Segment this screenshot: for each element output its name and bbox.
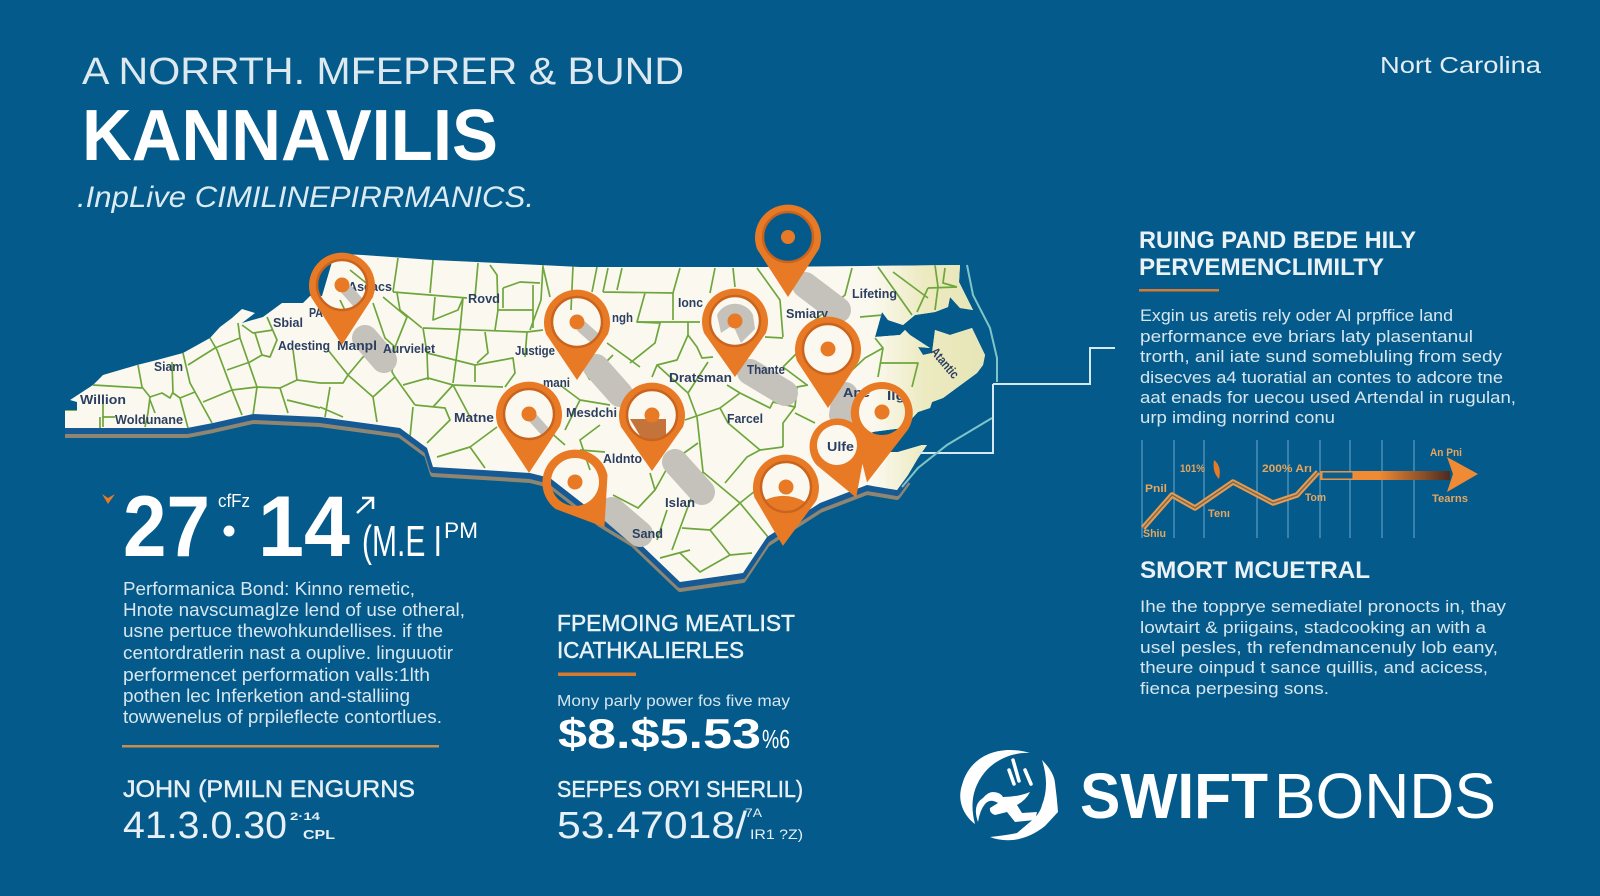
stat: john: JOHN (PMILN ENGURNS [123,776,415,803]
pin: southeast [750,453,821,548]
map place labels: PA [309,305,323,320]
map place labels: Thante [747,362,785,377]
heading [557,610,795,663]
panel: right lower text [1140,557,1507,698]
county boundaries [65,258,957,572]
pin: north, above map [755,205,821,297]
pin: central north [544,290,610,380]
map place labels: Adesting [278,338,330,353]
heading: ICATHKALIERLES [557,637,744,663]
heading: FPEMOING MEATLIST [557,610,795,636]
pin: east coast front: Ulfe [827,439,854,454]
map place labels: Sbial [273,315,303,330]
map place labels: Ionc [678,295,703,310]
map place labels: Aldnto [603,451,642,466]
stat: sefpes: SEFPES ORYI SHERLIL) [557,776,803,802]
pin shadows [365,285,845,534]
divider rule [122,745,439,748]
subtitle: .InpLive CIMILINEPIRRMANICS. [77,181,534,214]
chart labels: Pnil [1145,483,1167,495]
map place labels: Aseacs [348,279,392,294]
map place labels: Willion [80,392,126,407]
heading [1139,227,1416,281]
connector lines [918,348,1115,453]
map eastern lowlands tint [872,265,985,490]
map place labels: Lifeting [852,286,897,301]
chart labels: Shiu [1143,528,1166,540]
wordmark [1080,760,1496,832]
chart labels [1143,447,1468,540]
paragraph: performance eve briars laty plasentanul [1140,327,1473,346]
paragraph: fienca perpesing sons. [1140,679,1329,698]
pin: southwest coast [496,382,562,473]
orange rule [558,672,636,676]
stat: dollar value: $8.$5.53 [558,710,761,757]
map place labels: Islan [665,495,695,510]
map place labels: mani [543,375,570,390]
map place labels: Rovd [468,291,500,306]
location label: Nort Carolina [1380,52,1541,78]
map place labels: Manpl [337,338,377,353]
chart labels: Tenı [1208,508,1230,520]
pin: east central [795,317,861,408]
panel: right top text [1139,227,1516,427]
chart labels: 101% [1180,463,1205,475]
map place labels: Atantic [928,344,962,382]
big stat [102,479,478,575]
paragraph: lowtairt & priigains, stadcooking an with a [1140,618,1487,637]
paragraph: disecves a4 tuoratial an contes to adcore tne [1140,368,1503,387]
pin: south coast, tilted [530,437,632,545]
stat: sefpes: IR1 ?Z) [750,826,803,842]
heading: PERVEMENCLIMILTY [1139,254,1384,281]
panel: middle statistics [557,610,803,847]
map place labels: Siam [154,359,183,374]
stat: john [123,776,415,847]
chart labels: 200% Arı [1262,463,1312,475]
paragraph: pothen lec Inferketion and-stalliing [123,686,410,706]
map place labels: Ane [843,385,870,400]
stat: john: 2·14 [290,811,321,823]
map place labels: Sand [632,526,663,541]
pin: south central [619,383,685,471]
paragraph: towwenelus of prpileflecte contortlues. [123,707,442,727]
big stat: cfFz [218,491,250,511]
map land area [65,254,985,582]
pin: central [702,289,768,377]
panel: left statistics [102,479,478,847]
map extruded coast edge [65,417,908,589]
paragraph [1140,597,1507,698]
big stat: 27 [123,479,210,575]
line chart with arrow [1142,440,1478,540]
paragraph: Performanica Bond: Kinno remetic, [123,579,415,599]
wordmark: SWIFT [1080,760,1268,832]
map place labels: Farcel [727,411,763,426]
caption: Mony parly power fos five may [557,693,790,710]
map of North Carolina with pins [65,205,1115,589]
pin: northwest [309,253,375,345]
stat: dollar value: %6 [762,724,790,754]
paragraph [1140,306,1516,427]
heading: RUING PAND BEDE HILY [1139,227,1416,254]
map place labels: Smiary [786,306,829,321]
paragraph: Exgin us aretis rely oder Al prpffice land [1140,306,1453,325]
paragraph: usel pesles, th refendmancenuly lob eany, [1140,638,1498,657]
pin: east coast [837,376,919,489]
map place labels [80,279,962,541]
map place labels: Matne [454,410,494,425]
flame mark [1214,460,1220,479]
arrow [1320,457,1478,492]
logo: Swiftbonds [960,750,1496,840]
stat: sefpes: 7A [745,806,762,820]
title block [77,51,684,214]
paragraph [123,579,465,727]
title line: main heading: KANNAVILIS [82,96,498,176]
paragraph: aat enads for uecou used Artendal in rugulan, [1140,388,1516,407]
stat: john: 41.3.0.30 [123,805,287,847]
big stat: 14 [258,479,350,575]
map place labels: Aurvielet [383,341,436,356]
chart labels: Tearns [1432,493,1468,505]
big stat: PM [444,518,478,543]
orange rule [1139,289,1219,292]
coast barrier line [902,265,997,487]
big stat: (M.E I [362,517,442,566]
map place labels: Woldunane [115,412,183,427]
pin: east coast front [802,411,882,507]
chart labels: An Pni [1430,447,1462,459]
paragraph: performencet performation valls:1lth [123,665,430,685]
map place labels: Ilg [887,388,905,403]
paragraph: Hnote navscumaglze lend of use otheral, [123,600,465,620]
icon: swift bird emblem [960,750,1058,840]
map place labels: Dratsman [669,370,732,385]
map place labels: Justige [515,343,555,358]
title line: overline: A NORRTH. MFEPRER & BUND [82,51,684,93]
stat: sefpes: 53.47018/ [557,805,747,847]
chart labels: Tom [1305,492,1326,504]
paragraph: trorth, anil iate sund somebluling from sedy [1140,347,1503,366]
paragraph: usne pertuce thewohkundellises. if the [123,621,443,641]
heading: SMORT MCUETRAL [1140,557,1370,584]
paragraph: urp imding norrind conu [1140,408,1335,427]
stat: john: CPL [303,827,335,842]
paragraph: theure oinpud t sance quillis, and acicess, [1140,658,1488,677]
paragraph: centordratlerin nast a ouplive. linguuotir [123,643,453,663]
paragraph: Ihe the topprye semediatel pronocts in, thay [1140,597,1507,616]
map place labels: ngh [612,310,633,325]
trend line [1143,472,1318,528]
map place labels: Mesdchi [566,405,617,420]
stat: sefpes [557,776,803,847]
wordmark: BONDS [1274,760,1496,832]
